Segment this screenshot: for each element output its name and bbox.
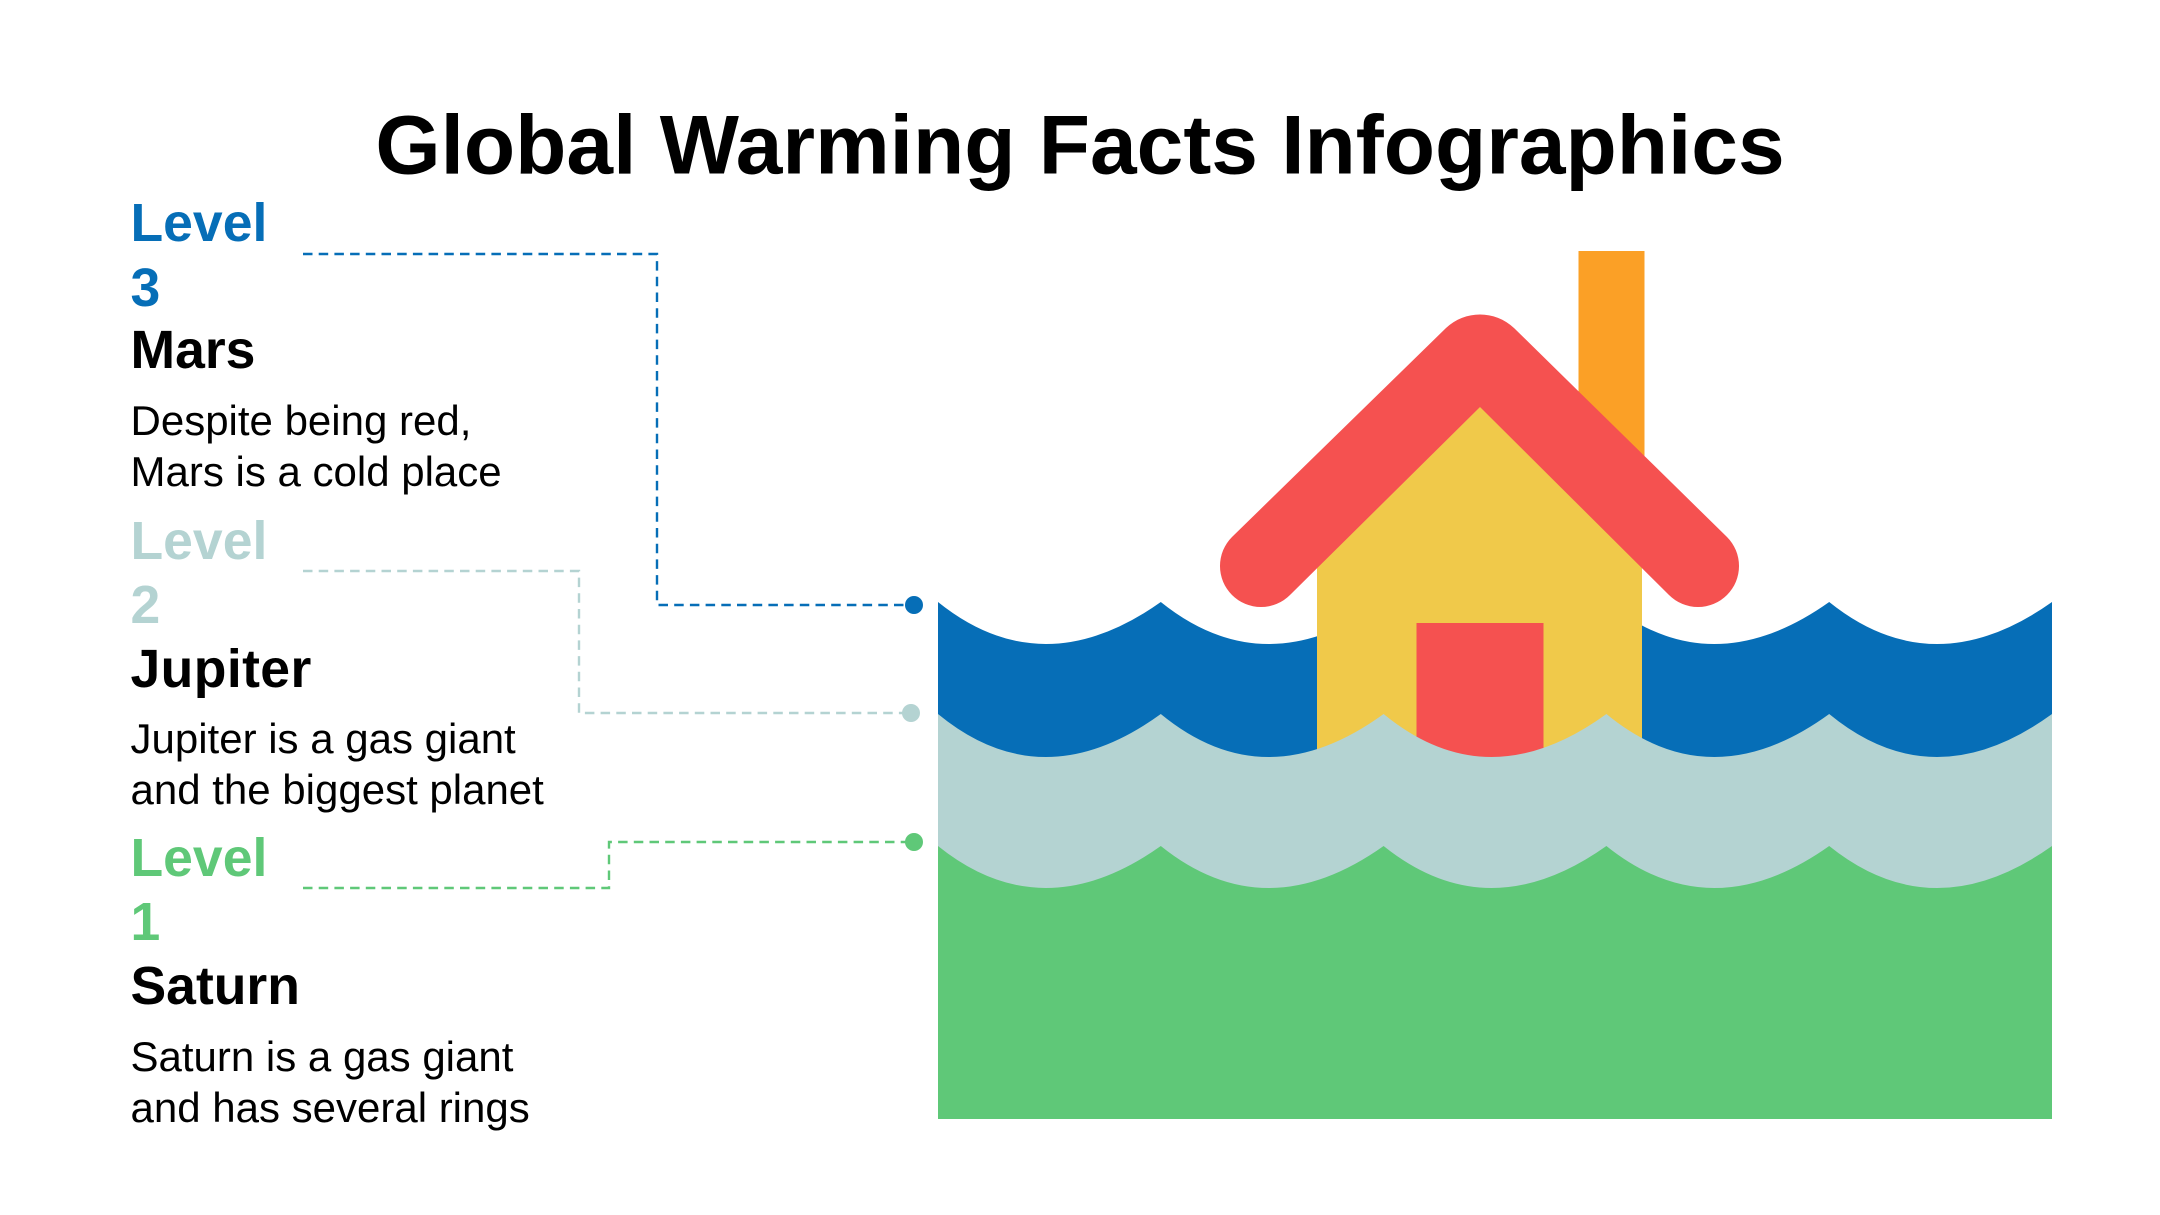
water level 3 wave [938,602,2052,800]
level 2 label: 2 [130,576,160,635]
Jupiter heading: Jupiter [130,640,312,699]
level 3 label: Level [130,194,267,253]
Saturn heading: Saturn [130,957,300,1016]
water level 1 wave [938,846,2052,1119]
illustration: flooded house [938,251,2052,1119]
Jupiter description: Jupiter is a gas giant [130,715,516,762]
Mars description: Despite being red, [130,397,471,444]
icon: house wall [1317,400,1642,790]
Saturn description: Saturn is a gas giant [130,1033,514,1080]
Mars heading: Mars [130,321,255,380]
level 3 label: 3 [130,259,160,318]
Mars description: Mars is a cold place [130,448,502,495]
connector: level 1 [303,833,923,888]
water level 2 wave [938,714,2052,1000]
Saturn description: and has several rings [130,1084,530,1131]
level 1 label: Level [130,829,267,888]
panel: level 3 text block [130,194,502,495]
Jupiter description: and the biggest planet [130,766,544,813]
panel: level 2 text block [130,512,544,813]
level 1 label: 1 [130,893,160,952]
title: Global Warming Facts Infographics [375,98,1785,192]
icon: roof [1220,314,1739,607]
icon: chimney [1578,251,1644,491]
icon: door [1416,623,1544,783]
connector: level 2 [303,571,920,722]
level 2 label: Level [130,512,267,571]
connector: level 3 [303,254,923,614]
panel: level 1 text block [130,829,530,1131]
